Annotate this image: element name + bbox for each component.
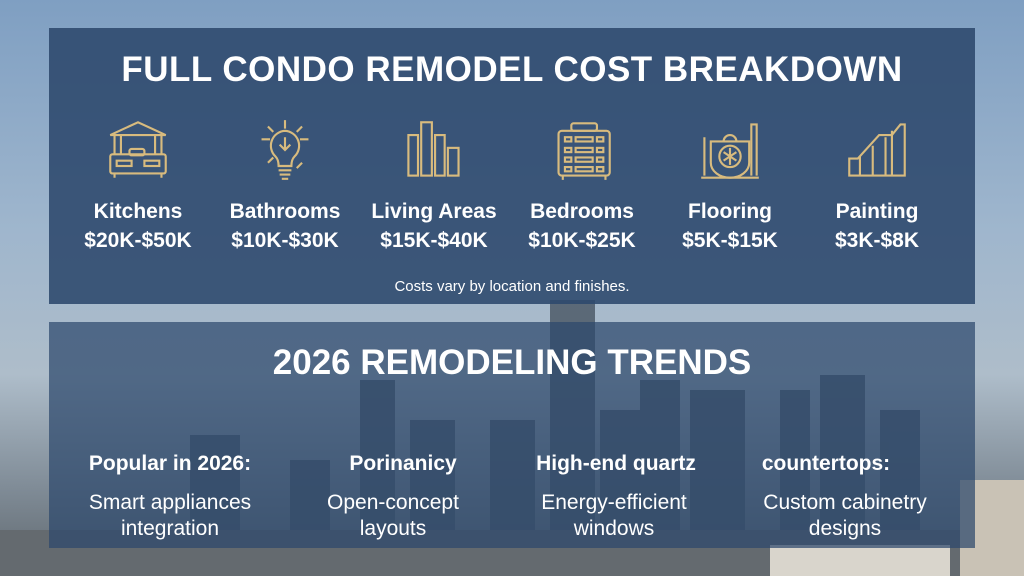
panel: trends — [49, 322, 975, 548]
trend 4: countertops: — [762, 452, 890, 475]
title: FULL CONDO REMODEL COST BREAKDOWN — [121, 50, 903, 89]
trend item 2: Open-concept layouts — [327, 491, 459, 540]
item: living areas: $15K-$40K — [380, 229, 488, 252]
trend item 3: Energy-efficient windows — [541, 491, 687, 540]
item: painting: Painting — [836, 200, 918, 223]
item: bathrooms: Bathrooms — [230, 200, 340, 223]
item: bathrooms — [230, 120, 340, 252]
item: bedrooms: $10K-$25K — [528, 229, 636, 252]
item: flooring — [682, 123, 778, 252]
panel: cost breakdown — [49, 28, 975, 304]
trends heading: 2026 REMODELING TRENDS — [273, 343, 751, 382]
note: Costs vary by location and finishes. — [394, 278, 630, 295]
trend 2: Porinanicy — [349, 452, 457, 475]
item: painting — [835, 123, 919, 252]
item: living areas — [371, 121, 497, 252]
item: bathrooms: $10K-$30K — [231, 229, 339, 252]
item: kitchens — [84, 121, 192, 252]
item: kitchens: $20K-$50K — [84, 229, 192, 252]
item: painting: $3K-$8K — [835, 229, 919, 252]
trend item 1: Smart appliances integration — [89, 491, 251, 540]
item: living areas: Living Areas — [371, 200, 497, 223]
trend item 4: Custom cabinetry designs — [763, 491, 927, 540]
trend 3: High-end quartz — [536, 452, 696, 475]
item: flooring: Flooring — [688, 200, 772, 223]
item: bedrooms — [528, 122, 636, 252]
trend 1: Popular in 2026: — [89, 452, 251, 475]
item: kitchens: Kitchens — [94, 200, 182, 223]
item: bedrooms: Bedrooms — [530, 200, 634, 223]
item: flooring: $5K-$15K — [682, 229, 778, 252]
